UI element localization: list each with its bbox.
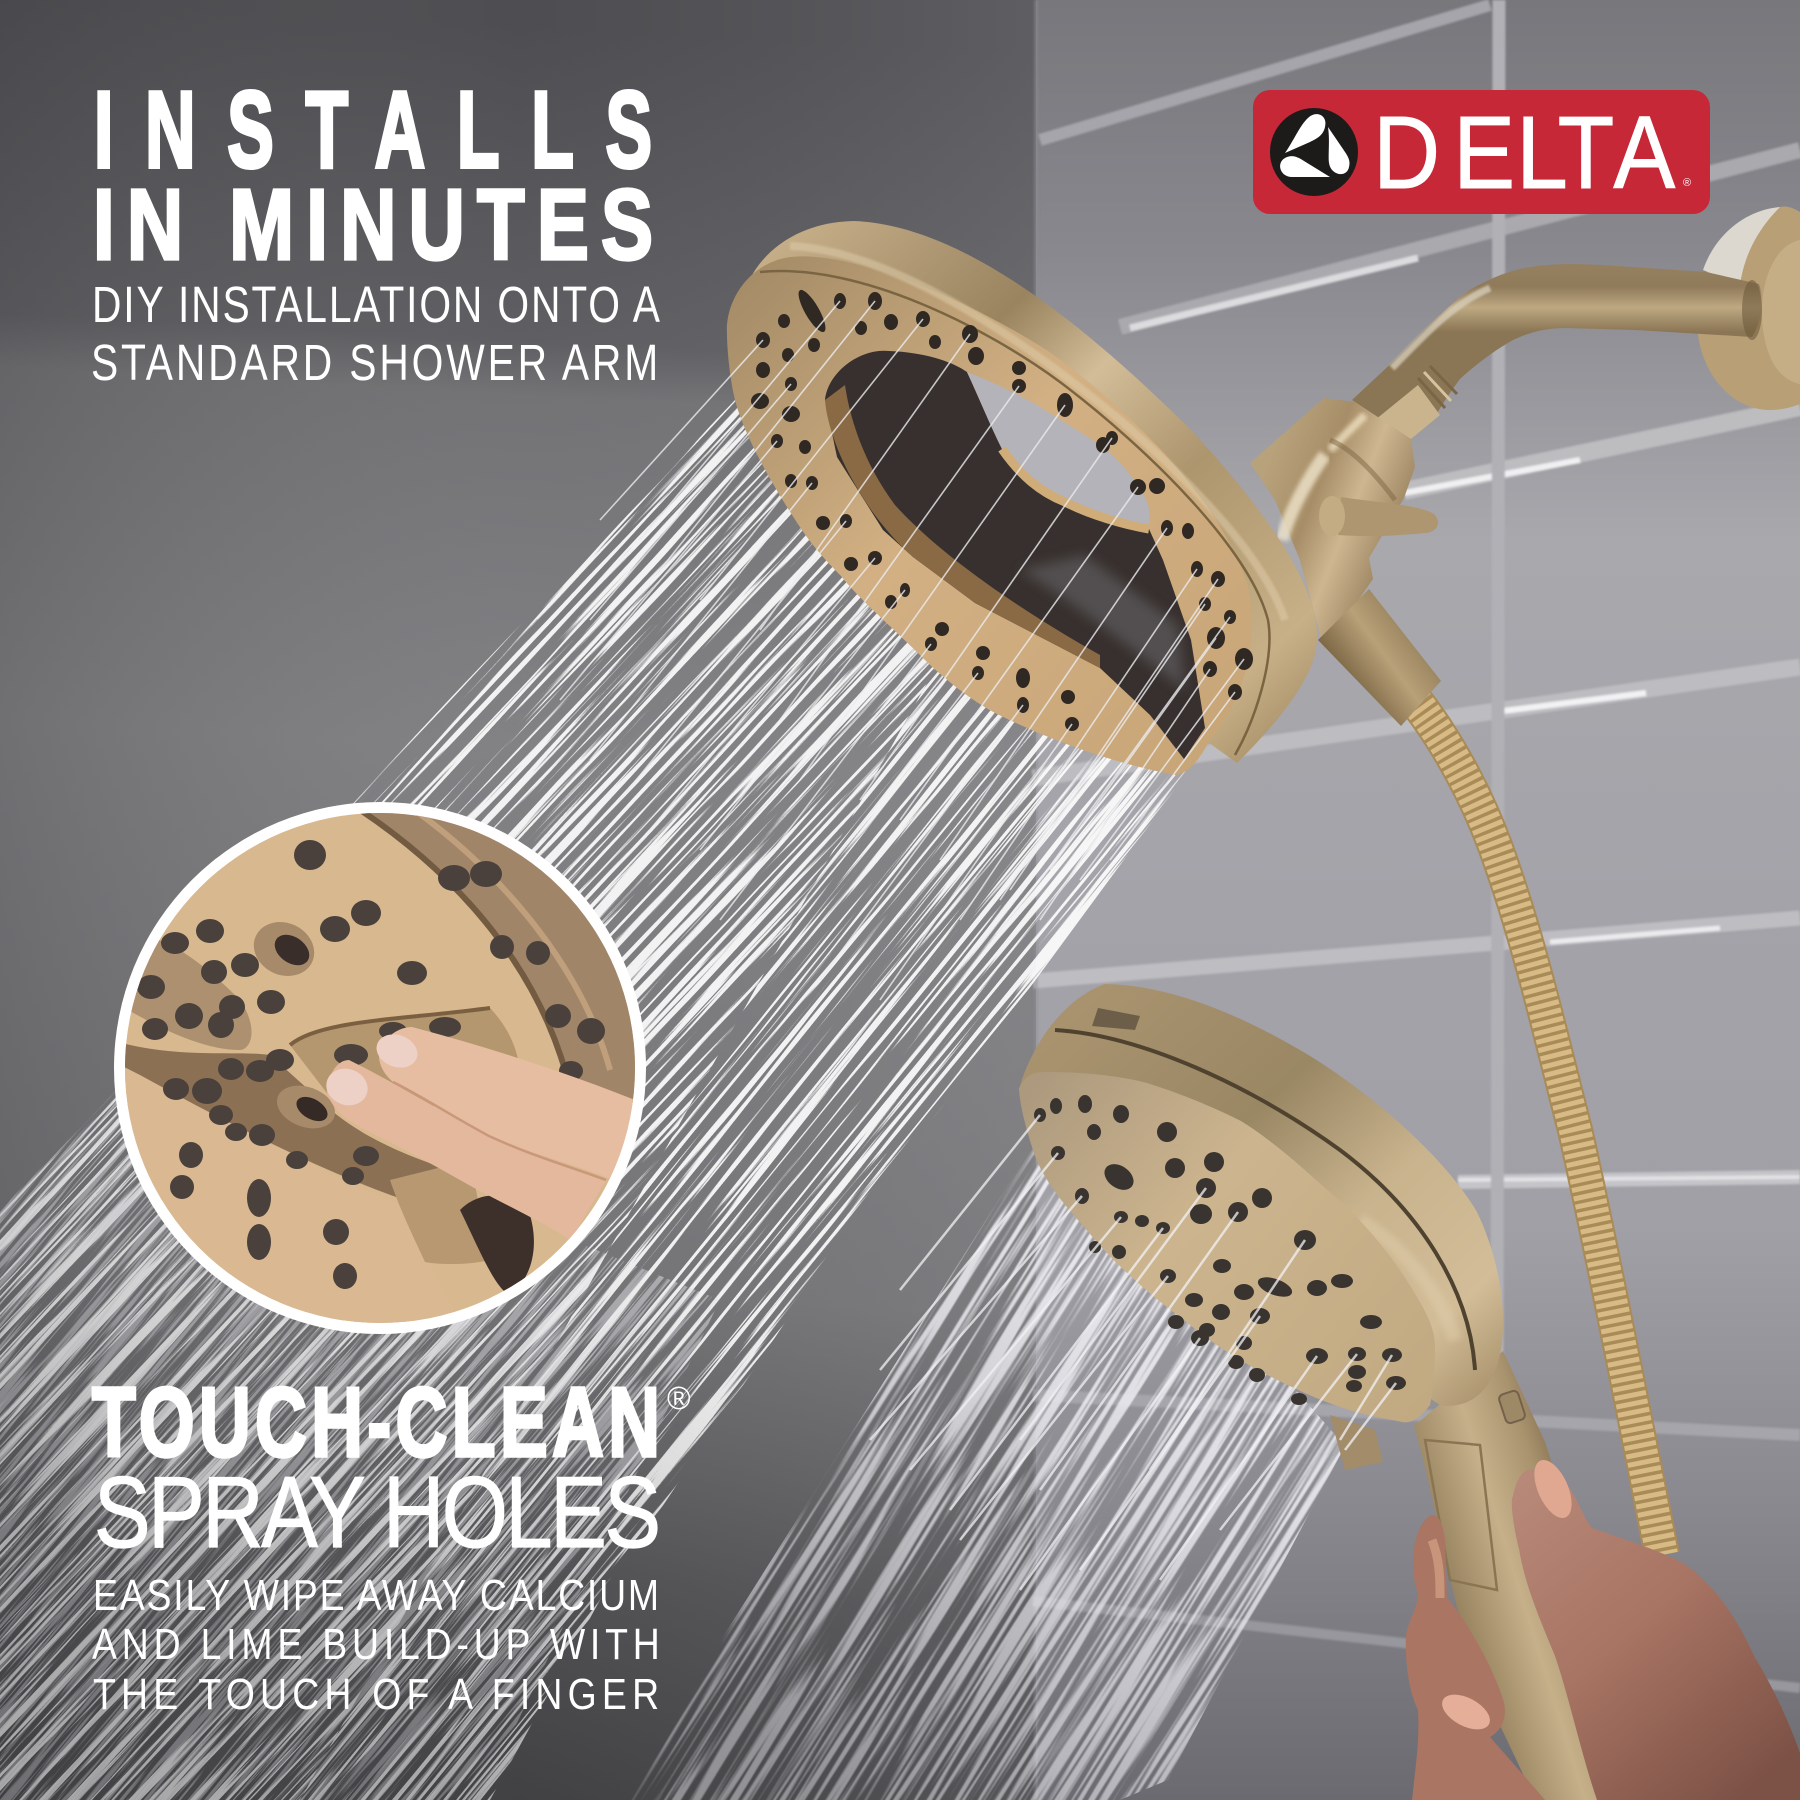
thumb and palm — [1512, 1469, 1800, 1800]
body text: wipe away calcium — [92, 1570, 660, 1719]
background: right tiled wall — [1033, 0, 1800, 1800]
bronze and grey reflections in the hole — [825, 385, 1100, 668]
handheld shower head — [1019, 984, 1628, 1800]
body text: wipe away calcium: THE TOUCH OF A FINGER — [93, 1669, 659, 1719]
inset spray holes — [137, 840, 605, 1289]
connector body and diverter knob — [1250, 398, 1438, 649]
body text: wipe away calcium: EASILY WIPE AWAY CALCIUM — [93, 1570, 659, 1620]
dark inner hole — [825, 351, 1205, 759]
hand holding handle — [1406, 1455, 1800, 1800]
mid wedge — [290, 1008, 520, 1110]
icon: Delta black circle — [1270, 108, 1358, 196]
finger nail — [1436, 1687, 1496, 1737]
heading: touch-clean spray holes — [92, 1368, 691, 1569]
background: left wall — [0, 0, 1036, 1800]
main head water jets — [560, 301, 1244, 1000]
heading: touch-clean spray holes: TOUCH-CLEAN — [92, 1368, 660, 1478]
subheading: DIY installation: STANDARD SHOWER ARM — [91, 334, 658, 391]
see-through opening — [967, 372, 1149, 529]
spray holes — [751, 287, 1253, 731]
subheading: DIY installation: DIY INSTALLATION ONTO A — [92, 276, 660, 333]
heading: touch-clean spray holes: SPRAY HOLES — [94, 1456, 661, 1569]
diverter knob — [1319, 496, 1438, 536]
subheading: DIY installation — [91, 276, 660, 391]
heading: touch-clean spray holes: ® — [667, 1380, 691, 1416]
handheld water jets — [870, 1115, 1396, 1590]
hose — [1415, 700, 1662, 1555]
head back rim — [1019, 984, 1503, 1406]
water spray: handheld head — [632, 1150, 1340, 1800]
handle — [1414, 1351, 1628, 1800]
shower arm — [1352, 264, 1762, 439]
fingers — [1406, 1515, 1545, 1800]
hose connector cone — [1318, 589, 1441, 726]
heading: installs in minutes: INSTALLS — [94, 69, 652, 191]
handheld spray holes — [1034, 1095, 1406, 1405]
wordmark: DELTA — [1373, 94, 1676, 210]
upper right darker band — [364, 813, 635, 1103]
thumb nail — [1527, 1455, 1579, 1523]
face plate — [727, 256, 1252, 775]
outer rim — [745, 221, 1317, 763]
finger nails — [376, 1034, 418, 1068]
heading: installs in minutes — [93, 69, 653, 281]
circular inset: touch-clean close-up — [110, 800, 660, 1340]
wall flange — [1697, 207, 1800, 410]
centre disc — [131, 940, 252, 1050]
body text: wipe away calcium: AND LIME BUILD-UP WITH — [92, 1619, 660, 1669]
rim step lines — [760, 271, 1269, 755]
logo: Delta — [1253, 90, 1710, 214]
trigger and dark gap — [390, 1168, 484, 1264]
water spray: main head — [0, 400, 1186, 1800]
registered mark: ® — [1683, 177, 1691, 189]
main shower head — [727, 221, 1317, 775]
heading: installs in minutes: IN MINUTES — [93, 170, 653, 281]
inner holes — [254, 922, 314, 976]
trigger — [1330, 1415, 1383, 1470]
head face — [1019, 1072, 1435, 1422]
fingers — [379, 1027, 640, 1185]
lower dark sweep — [125, 1044, 438, 1197]
